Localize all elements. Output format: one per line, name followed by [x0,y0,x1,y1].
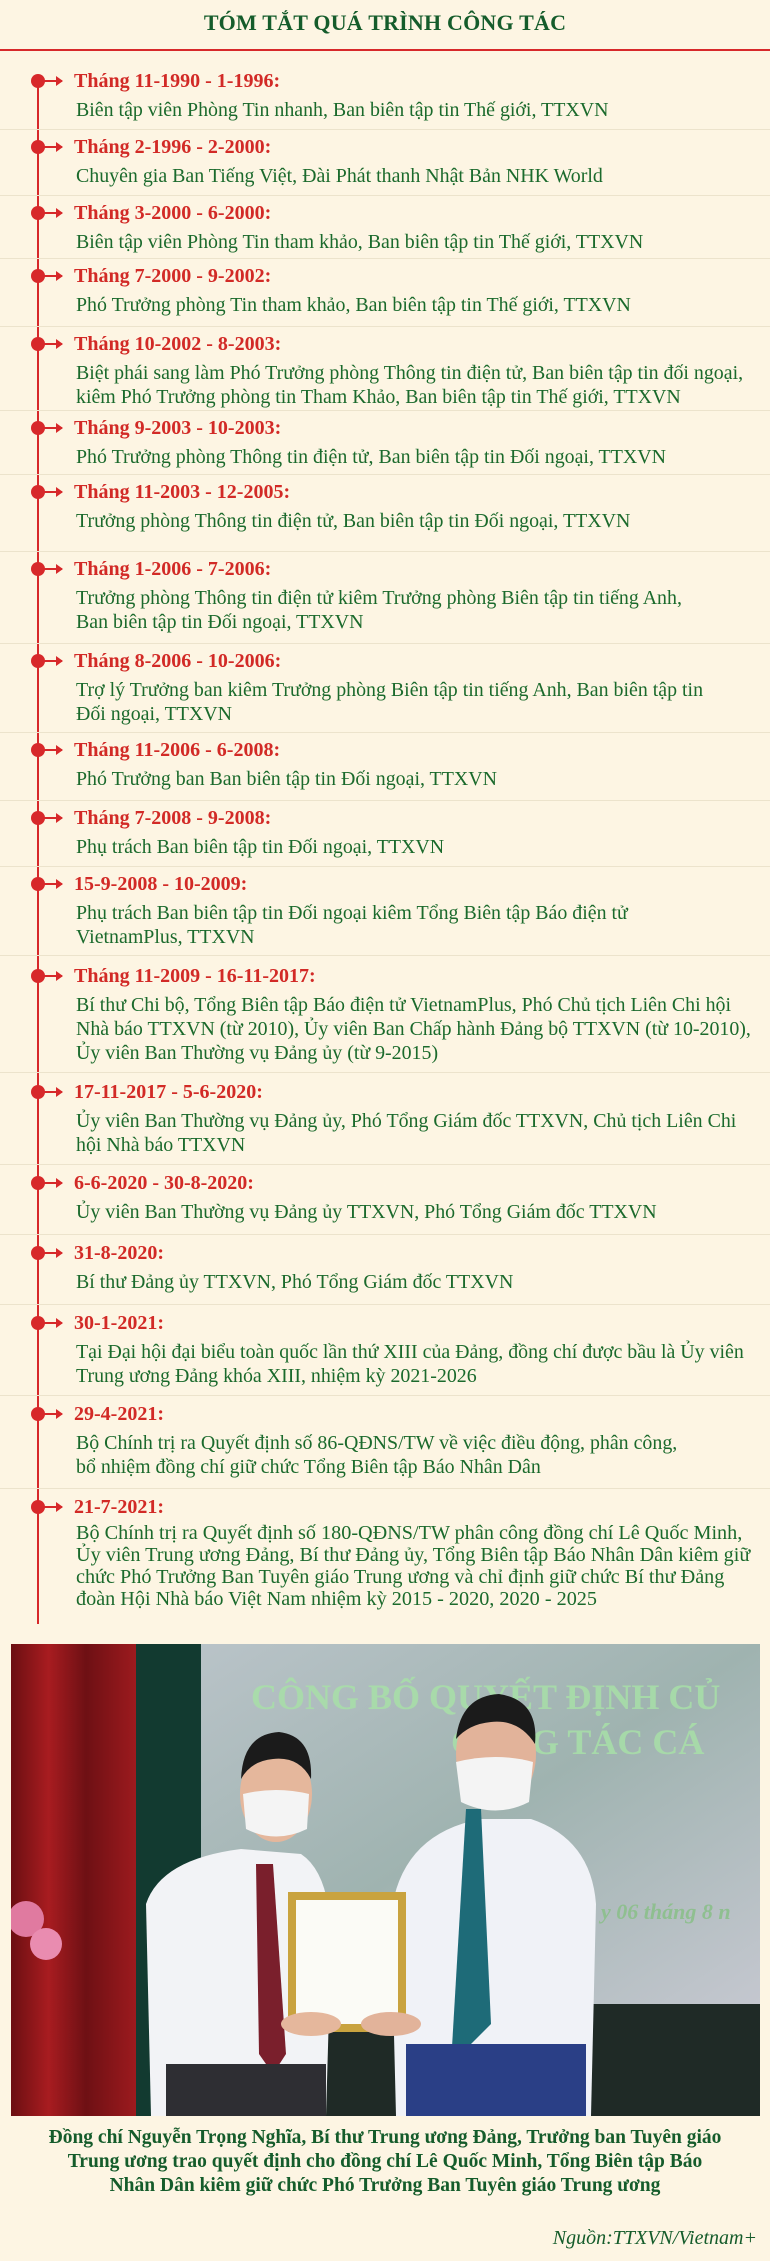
photo [11,1644,760,2116]
entry 17 [31,1312,744,1387]
entry 18 [31,1403,677,1478]
entry 17: Tại Đại hội đại biểu toàn quốc lần thứ XIII của Đảng, đồng chí được bầu là Ủy viên [76,1341,744,1363]
entry 19: 21-7-2021: [74,1496,164,1518]
entry 3: Biên tập viên Phòng Tin tham khảo, Ban biên tập tin Thế giới, TTXVN [76,231,643,253]
entry 19: Ủy viên Trung ương Đảng, Bí thư Đảng ủy, Tổng Biên tập Báo Nhân Dân kiêm giữ [76,1544,750,1566]
entry 10: Phó Trưởng ban Ban biên tập tin Đối ngoại, TTXVN [76,768,497,790]
entry 18: Bộ Chính trị ra Quyết định số 86-QĐNS/TW về việc điều động, phân công, [76,1432,677,1454]
photo: CÔNG BỐ QUYẾT ĐỊNH CỦ [251,1676,720,1717]
entry 2: Tháng 2-1996 - 2-2000: [74,136,271,158]
entry 14 [31,1081,736,1156]
entry 13: Nhà báo TTXVN (từ 2010), Ủy viên Ban Chấp hành Đảng bộ TTXVN (từ 10-2010), [76,1018,751,1040]
entry 5 [31,333,743,408]
entry 15 [31,1172,657,1223]
entry 1 [31,70,608,121]
entry 17: 30-1-2021: [74,1312,164,1334]
entry 12: VietnamPlus, TTXVN [76,926,255,948]
entry 14: hội Nhà báo TTXVN [76,1134,245,1156]
entry 10 [31,739,497,790]
entry 4: Tháng 7-2000 - 9-2002: [74,265,271,287]
entry 13: Ủy viên Ban Thường vụ Đảng ủy (từ 9-2015) [76,1042,438,1064]
entry 14: Ủy viên Ban Thường vụ Đảng ủy, Phó Tổng Giám đốc TTXVN, Chủ tịch Liên Chi [76,1110,736,1132]
entry 9 [31,650,703,725]
entry 7: Trưởng phòng Thông tin điện tử, Ban biên tập tin Đối ngoại, TTXVN [76,510,630,532]
entry 4 [31,265,631,316]
entry 11: Phụ trách Ban biên tập tin Đối ngoại, TTXVN [76,836,444,858]
entry 16: Bí thư Đảng ủy TTXVN, Phó Tổng Giám đốc TTXVN [76,1271,513,1293]
entry 2 [31,136,603,187]
entry 8 [31,558,682,633]
photo: y 06 tháng 8 n [598,1899,731,1924]
entry 12: 15-9-2008 - 10-2009: [74,873,247,895]
caption [49,2127,721,2196]
entry 19 [31,1496,751,1610]
entry 17: Trung ương Đảng khóa XIII, nhiệm kỳ 2021-2026 [76,1365,477,1387]
entry 13: Tháng 11-2009 - 16-11-2017: [74,965,316,987]
entry 1: Biên tập viên Phòng Tin nhanh, Ban biên tập tin Thế giới, TTXVN [76,99,608,121]
entry 16: 31-8-2020: [74,1242,164,1264]
entry 4: Phó Trưởng phòng Tin tham khảo, Ban biên tập tin Thế giới, TTXVN [76,294,631,316]
certificate [288,1892,406,2032]
entry 13 [31,965,751,1064]
entry 12 [31,873,628,948]
source: Nguồn:TTXVN/Vietnam+ [553,2227,757,2249]
entry 18: 29-4-2021: [74,1403,164,1425]
entry 8: Tháng 1-2006 - 7-2006: [74,558,271,580]
left person [146,1849,331,2116]
timeline line [37,75,39,1624]
caption: Nhân Dân kiêm giữ chức Phó Trưởng Ban Tuyên giáo Trung ương [110,2175,660,2196]
entry 2: Chuyên gia Ban Tiếng Việt, Đài Phát thanh Nhật Bản NHK World [76,165,603,187]
entry 5: Tháng 10-2002 - 8-2003: [74,333,281,355]
entry 9: Trợ lý Trưởng ban kiêm Trưởng phòng Biên tập tin tiếng Anh, Ban biên tập tin [76,679,703,701]
entry 11 [31,807,444,858]
entry 3: Tháng 3-2000 - 6-2000: [74,202,271,224]
entry 7 [31,481,630,532]
entry 15: Ủy viên Ban Thường vụ Đảng ủy TTXVN, Phó Tổng Giám đốc TTXVN [76,1201,657,1223]
entry 8: Trưởng phòng Thông tin điện tử kiêm Trưởng phòng Biên tập tin tiếng Anh, [76,587,682,609]
entry 15: 6-6-2020 - 30-8-2020: [74,1172,254,1194]
entry 6: Phó Trưởng phòng Thông tin điện tử, Ban biên tập tin Đối ngoại, TTXVN [76,446,666,468]
photo: CÔNG TÁC CÁ [451,1722,704,1762]
entry 19: đoàn Hội Nhà báo Việt Nam nhiệm kỳ 2015 - 2020, 2020 - 2025 [76,1588,597,1610]
right person [391,1819,596,2116]
entry 12: Phụ trách Ban biên tập tin Đối ngoại kiêm Tổng Biên tập Báo điện tử [76,902,628,924]
entry 7: Tháng 11-2003 - 12-2005: [74,481,290,503]
entry 9: Tháng 8-2006 - 10-2006: [74,650,281,672]
entry 10: Tháng 11-2006 - 6-2008: [74,739,280,761]
entry 13: Bí thư Chi bộ, Tổng Biên tập Báo điện tử VietnamPlus, Phó Chủ tịch Liên Chi hội [76,994,731,1016]
entry 19: chức Phó Trưởng Ban Tuyên giáo Trung ương và chỉ định giữ chức Bí thư Đảng [76,1566,724,1588]
entry 14: 17-11-2017 - 5-6-2020: [74,1081,263,1103]
entry 5: kiêm Phó Trưởng phòng tin Tham Khảo, Ban biên tập tin Thế giới, TTXVN [76,386,681,408]
entry 1: Tháng 11-1990 - 1-1996: [74,70,280,92]
entry 16 [31,1242,513,1293]
caption: Trung ương trao quyết định cho đồng chí Lê Quốc Minh, Tổng Biên tập Báo [68,2151,702,2172]
entry 3 [31,202,643,253]
entry 19: Bộ Chính trị ra Quyết định số 180-QĐNS/TW phân công đồng chí Lê Quốc Minh, [76,1522,742,1544]
caption: Đồng chí Nguyễn Trọng Nghĩa, Bí thư Trung ương Đảng, Trưởng ban Tuyên giáo [49,2127,721,2148]
entry 6: Tháng 9-2003 - 10-2003: [74,417,281,439]
entry 8: Ban biên tập tin Đối ngoại, TTXVN [76,611,363,633]
entry 9: Đối ngoại, TTXVN [76,703,232,725]
entry 5: Biệt phái sang làm Phó Trưởng phòng Thông tin điện tử, Ban biên tập tin đối ngoại, [76,362,743,384]
entry 6 [31,417,666,468]
entry 11: Tháng 7-2008 - 9-2008: [74,807,271,829]
entry 18: bổ nhiệm đồng chí giữ chức Tổng Biên tập Báo Nhân Dân [76,1456,541,1478]
title: TÓM TẮT QUÁ TRÌNH CÔNG TÁC [204,10,566,35]
